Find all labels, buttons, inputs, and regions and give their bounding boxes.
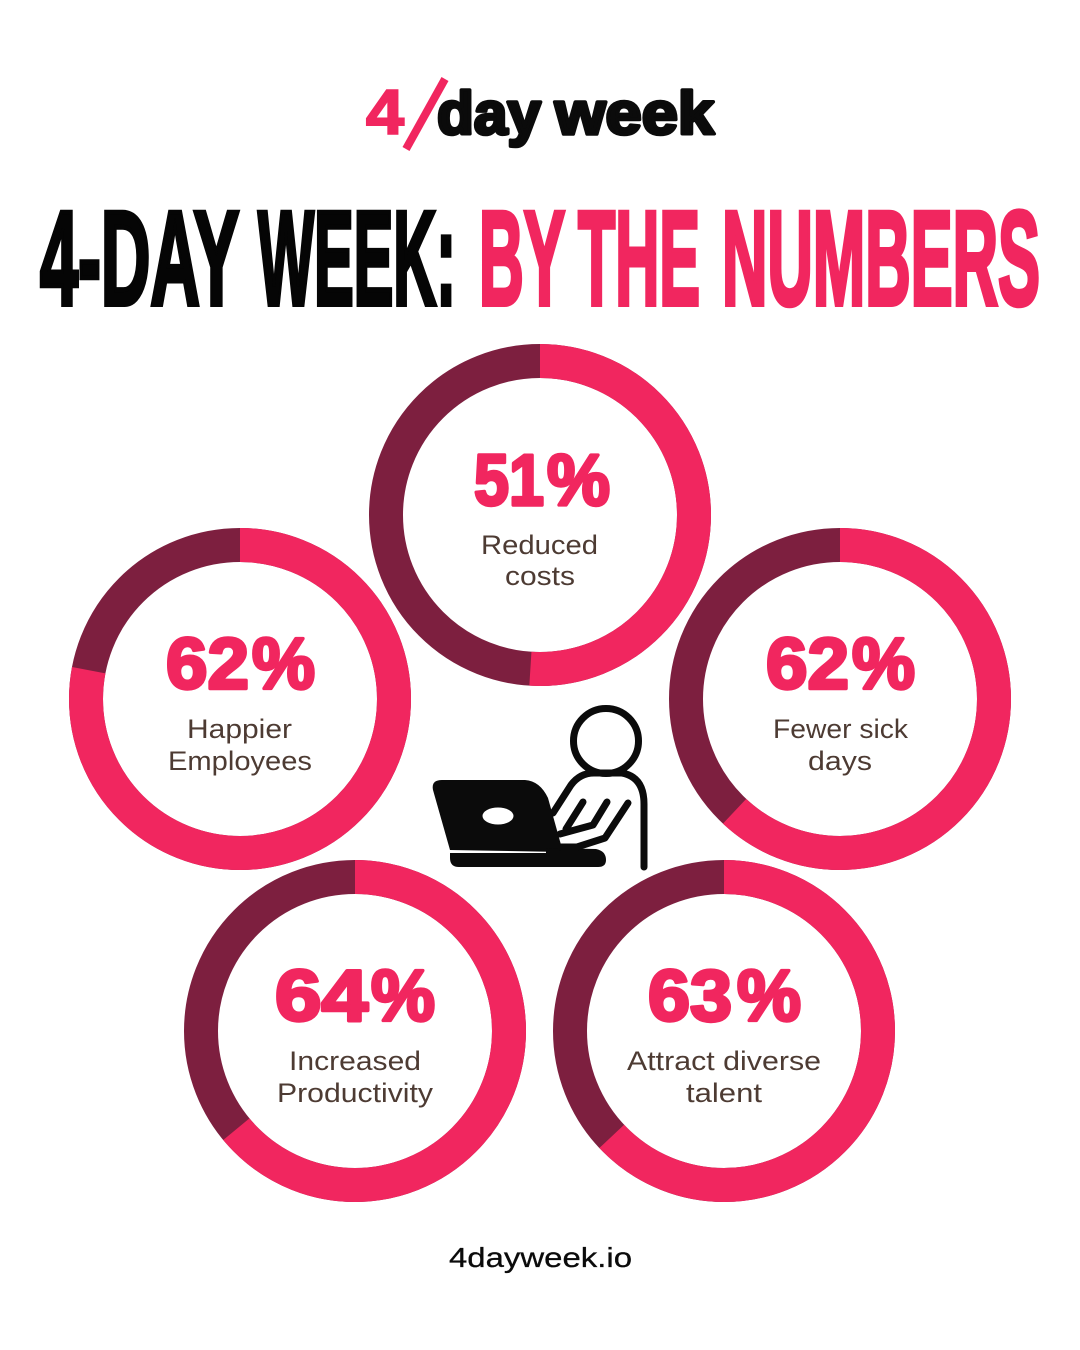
footer url: 4dayweek.io <box>449 1242 632 1273</box>
icon: person at laptop <box>433 708 644 867</box>
label: Happier Employees <box>168 714 312 776</box>
logo: 4/day week: 4 <box>366 78 404 148</box>
panel: 62% happier employees <box>86 545 394 853</box>
label: Reduced costs: Reduced <box>481 530 598 560</box>
label: Increased Productivity: Increased <box>289 1046 421 1076</box>
stat: 63%: 63 <box>648 956 732 1036</box>
label: Increased Productivity: Productivity <box>277 1078 434 1108</box>
panel: 63% attract diverse talent <box>570 877 878 1185</box>
stat: 62%: 62 <box>166 624 249 704</box>
donut ring 62% right <box>686 545 994 853</box>
logo: 4/day week: day <box>437 80 542 147</box>
logo: 4/day week <box>366 78 715 149</box>
donut ring 62% left <box>86 545 394 853</box>
title: WEEK: <box>258 184 456 334</box>
label: Happier Employees: Employees <box>168 746 312 776</box>
label: Reduced costs: costs <box>505 561 575 591</box>
title: BY <box>479 184 564 334</box>
label: Attract diverse talent: Attract diverse <box>627 1046 821 1076</box>
title: 4-DAY <box>40 184 239 334</box>
stat: 63%: % <box>737 956 801 1036</box>
stat: 64%: % <box>371 956 435 1036</box>
label: Fewer sick days: days <box>808 746 872 776</box>
label: Reduced costs <box>481 530 598 591</box>
stat: 51%: % <box>547 441 610 521</box>
stat: 64%: 64 <box>275 956 368 1036</box>
label: Happier Employees: Happier <box>187 714 292 744</box>
donut ring 63% <box>570 877 878 1185</box>
label: Fewer sick days: Fewer sick <box>773 714 909 744</box>
panel: 51% reduced costs <box>386 361 694 669</box>
logo: 4/day week: week <box>554 80 715 147</box>
stat: 62%: % <box>852 624 915 704</box>
panel: 64% increased productivity <box>201 877 509 1185</box>
stat: 51%: 51 <box>474 441 544 521</box>
stat: 62%: % <box>252 624 315 704</box>
label: Attract diverse talent <box>627 1046 821 1108</box>
label: Increased Productivity <box>277 1046 434 1108</box>
title: THE <box>578 184 700 334</box>
panel: 62% fewer sick days <box>686 545 994 853</box>
donut ring 64% <box>201 877 509 1185</box>
stat: 62%: 62 <box>766 624 849 704</box>
title <box>40 184 1040 334</box>
label: Attract diverse talent: talent <box>686 1078 763 1108</box>
label: Fewer sick days <box>773 714 909 776</box>
donut ring 51% <box>386 361 694 669</box>
